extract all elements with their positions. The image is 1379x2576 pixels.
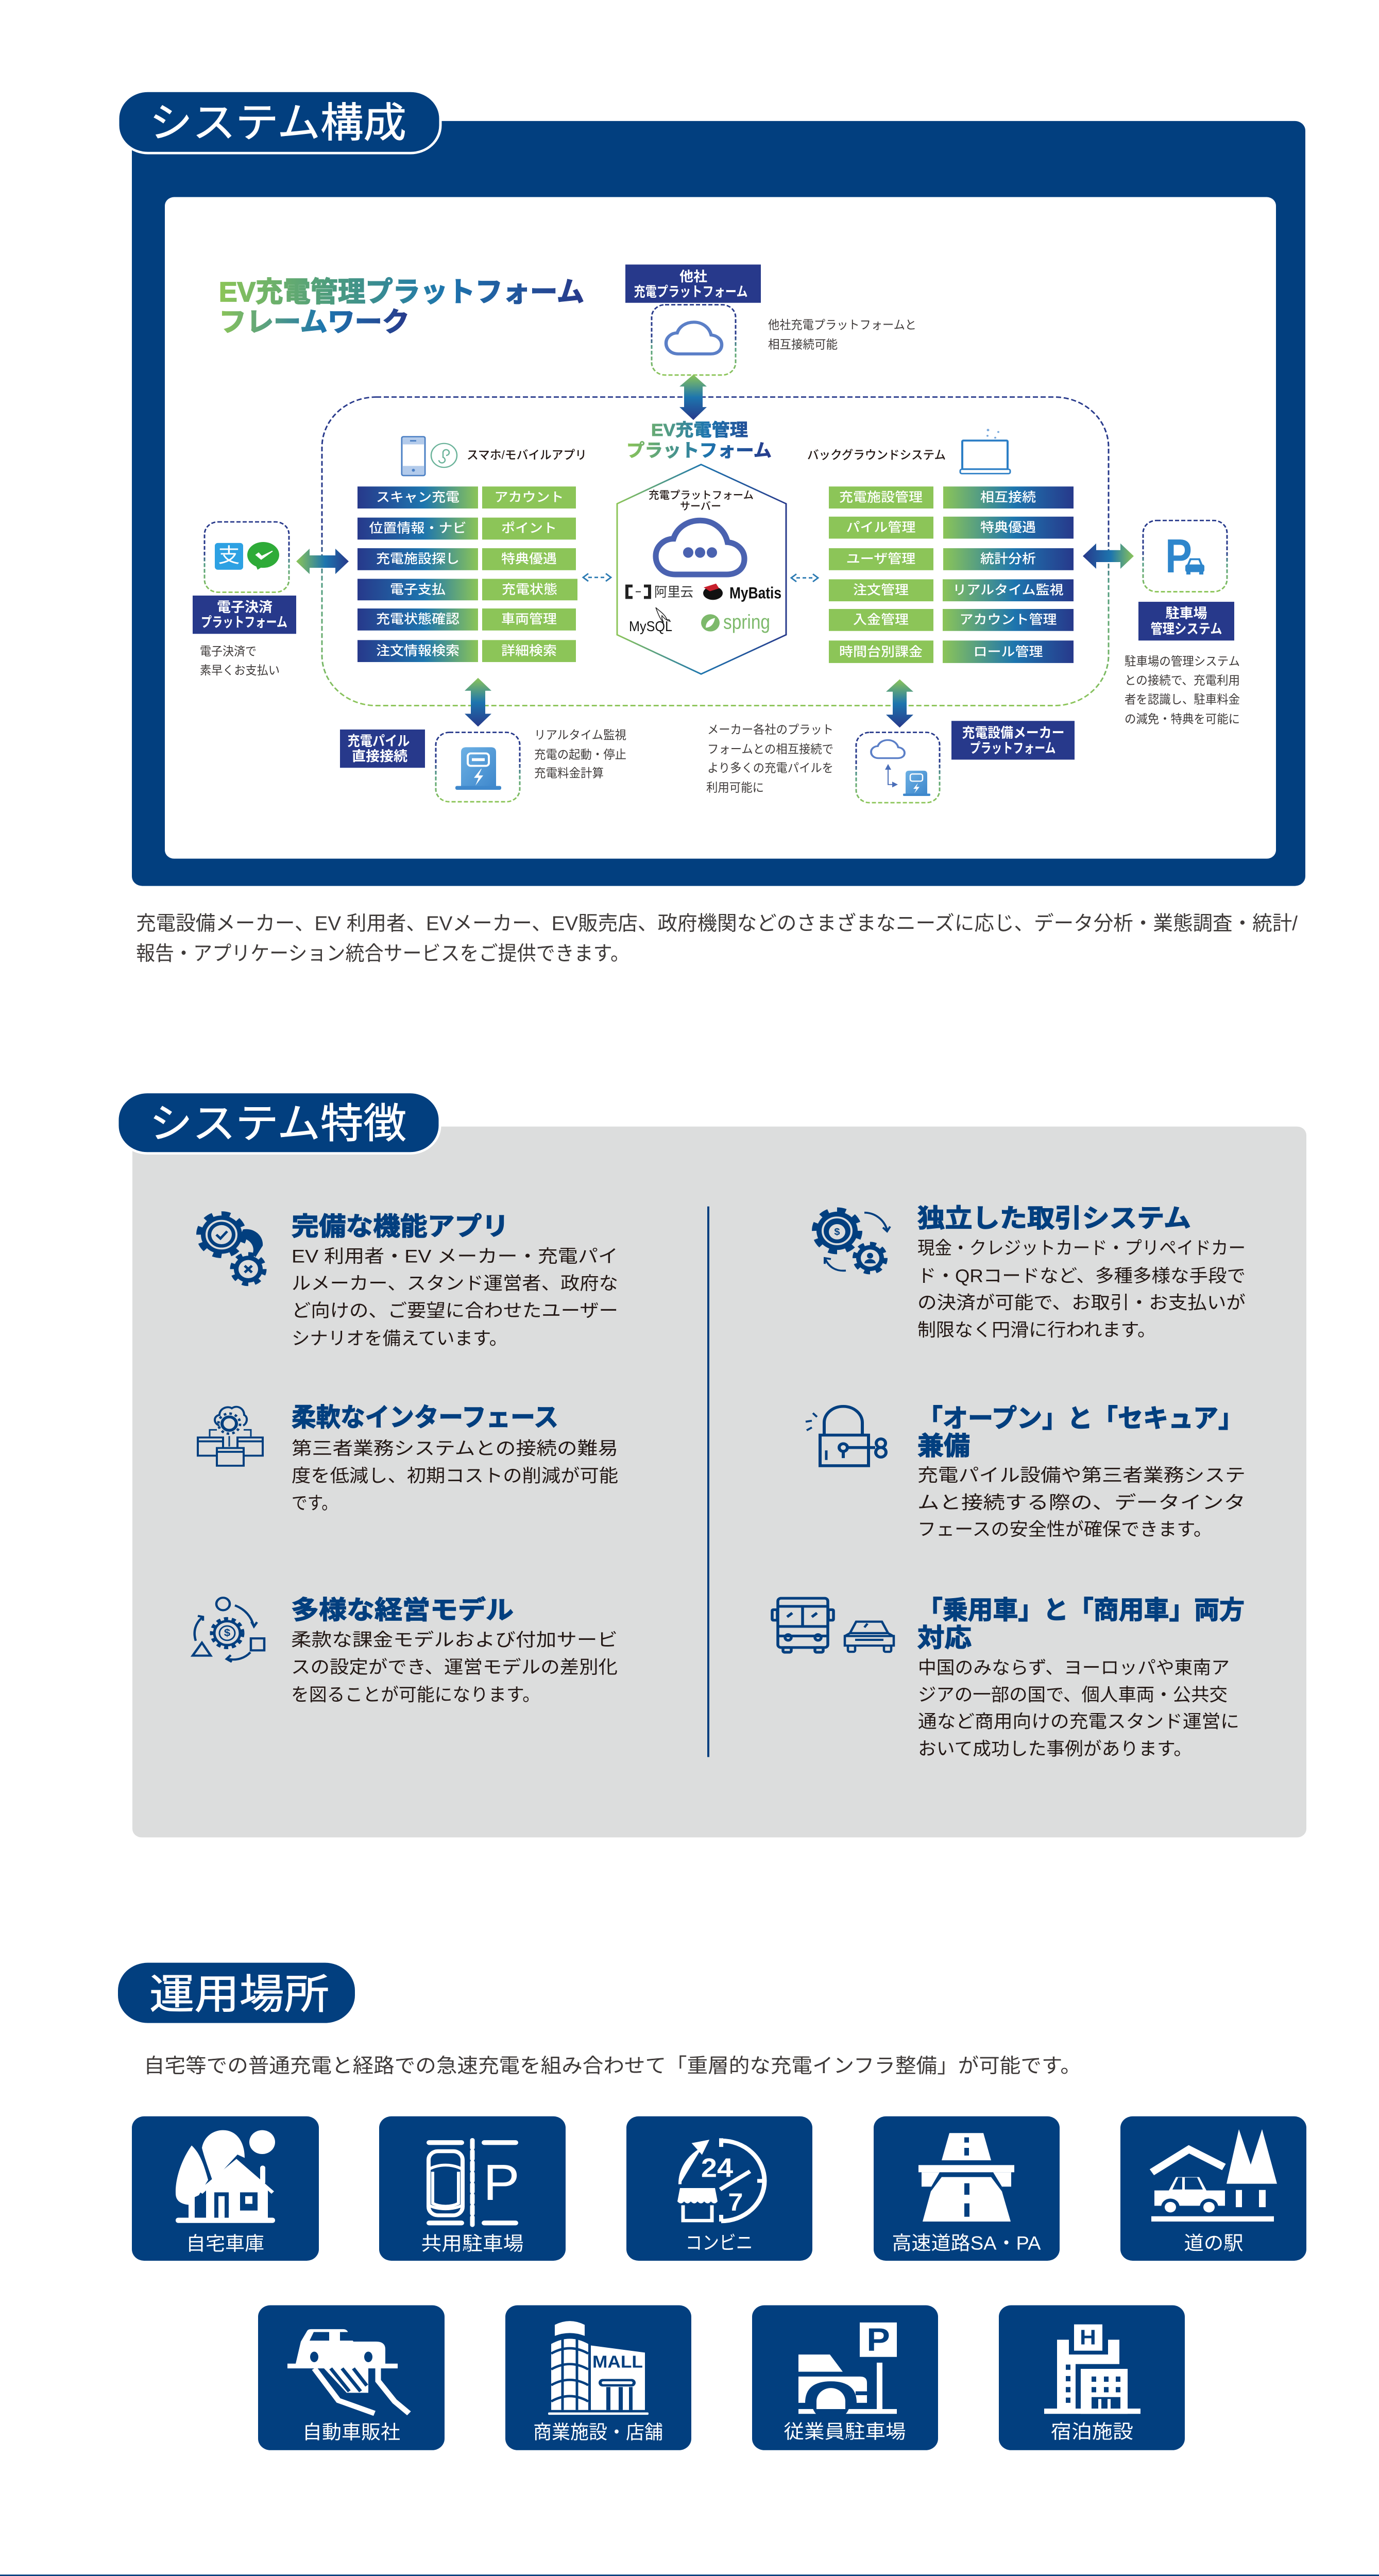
title: 独立した取引システム — [917, 1204, 1191, 1232]
icon: parking bay — [429, 2140, 516, 2226]
arrow: background to equipment maker — [886, 679, 913, 727]
heading pill — [117, 1092, 440, 1154]
body: の決済が可能で、お取引・お支払いが — [917, 1293, 1246, 1313]
navy frame — [132, 121, 1305, 886]
title: 柔軟なインターフェース — [292, 1403, 558, 1432]
card: highway service area — [874, 2116, 1060, 2261]
intro text: 自宅等での普通充電と経路での急速充電を組み合わせて「重層的な充電インフラ整備」が可能です。 — [144, 2054, 1081, 2077]
feature buttons: background system: ユーザ管理 — [846, 551, 915, 566]
icon: car on platform — [287, 2329, 409, 2413]
caption text — [136, 912, 1298, 965]
feature buttons: background system: 充電施設管理 — [839, 489, 923, 504]
body: 通など商用向けの充電スタンド運営に — [918, 1711, 1239, 1732]
feature buttons: background system: 入金管理 — [853, 612, 909, 627]
description: 者を認識し、駐車料金 — [1125, 693, 1240, 706]
feature buttons: mobile app: 詳細検索 — [501, 643, 557, 658]
icon: charger — [455, 747, 501, 790]
white inner panel — [165, 197, 1276, 859]
body — [292, 1246, 618, 1349]
dashed icon box — [205, 522, 289, 592]
arrow: app to charger — [465, 678, 491, 726]
icon: hotel — [1044, 2325, 1140, 2414]
feature buttons: background system: 相互接続 — [980, 489, 1036, 504]
icon: cloud and windows — [198, 1407, 263, 1466]
feature buttons: mobile app: 位置情報・ナビ — [369, 521, 466, 536]
arrow: app to server — [583, 573, 611, 581]
body — [291, 1630, 618, 1705]
other-company platform node — [625, 264, 916, 375]
dashed icon box — [436, 733, 520, 802]
panel: system features — [117, 1092, 1306, 1837]
body: ド・QRコードなど、多種多様な手段で — [917, 1266, 1246, 1286]
icon: phone — [402, 437, 425, 476]
description — [1125, 655, 1240, 726]
large dashed platform boundary — [322, 397, 1109, 706]
description: 利用可能に — [706, 781, 764, 794]
body: 充電パイル設備や第三者業務システ — [917, 1465, 1246, 1485]
feature: independent payment — [814, 1204, 1246, 1340]
feature: flexible interface — [198, 1403, 618, 1513]
label box: 充電パイル — [348, 733, 410, 749]
description: より多くの充電パイルを — [707, 761, 833, 775]
icon: mall building — [548, 2321, 649, 2415]
label: 自動車販社 — [302, 2422, 400, 2443]
caption text: 報告・アプリケーション統合サービスをご提供できます。 — [136, 942, 629, 965]
description — [200, 645, 280, 677]
icon: laptop — [960, 429, 1010, 473]
feature: complete app — [199, 1212, 618, 1349]
body — [918, 1657, 1239, 1759]
label box: 充電プラットフォーム — [634, 284, 748, 299]
feature buttons: mobile app: 充電状態確認 — [376, 612, 459, 626]
label box: 駐車場 — [1165, 605, 1207, 621]
arrow: background to parking — [1083, 544, 1134, 569]
feature buttons: mobile app: ポイント — [501, 521, 557, 536]
icon: link arrow — [885, 764, 898, 787]
icon: money gears: $ — [834, 1227, 840, 1238]
body: を図ることが可能になります。 — [291, 1685, 540, 1705]
body: ジアの一部の国で、個人車両・公共交 — [918, 1685, 1228, 1705]
feature buttons: background system: 注文管理 — [853, 582, 909, 597]
label box — [193, 596, 296, 634]
background system header — [807, 429, 1010, 473]
diagram title — [219, 276, 584, 337]
description: 駐車場の管理システム — [1125, 655, 1240, 668]
label box: 管理システム — [1151, 621, 1222, 637]
feature buttons: mobile app: スキャン充電 — [376, 489, 459, 504]
icon: parked car with sign — [798, 2323, 897, 2420]
logo: aliyun — [627, 585, 693, 600]
label box: 充電設備メーカー — [962, 725, 1064, 740]
description: 他社充電プラットフォームと — [768, 318, 916, 332]
description — [768, 318, 916, 351]
feature: open and secure — [806, 1404, 1246, 1539]
logo: spring — [701, 611, 770, 633]
section heading panel: system configuration — [118, 91, 1305, 886]
icon: house and trees — [176, 2130, 275, 2223]
feature buttons: mobile app: 車両管理 — [501, 612, 557, 626]
icon: charger small — [903, 771, 930, 796]
heading pill — [118, 91, 440, 153]
icon: wechat — [247, 542, 279, 570]
card: lodging — [999, 2305, 1185, 2450]
arrow: payment to app — [296, 549, 349, 574]
icon: P letter: P — [866, 2321, 890, 2358]
label: 共用駐車場 — [421, 2233, 523, 2255]
icon: cloud with dots — [656, 520, 744, 574]
icon: padlock — [806, 1406, 886, 1466]
dashed icon box — [652, 304, 736, 375]
card: convenience store — [626, 2116, 812, 2261]
body: 現金・クレジットカード・プリペイドカー — [917, 1238, 1246, 1258]
body — [917, 1238, 1246, 1340]
label box: 直接接続 — [352, 749, 407, 764]
feature buttons: background system: 特典優遇 — [980, 520, 1036, 535]
label box — [340, 730, 425, 768]
feature buttons: background system: リアルタイム監視 — [952, 582, 1064, 597]
icon: alipay: 支 — [218, 544, 240, 567]
feature buttons: background system — [829, 486, 1074, 663]
divider — [707, 1207, 709, 1757]
icon: bus — [772, 1598, 833, 1652]
icon: P letter: P — [483, 2154, 520, 2211]
icon: H letter: H — [1080, 2326, 1096, 2349]
icon: 24/7 clock and shop — [677, 2138, 764, 2222]
description: 素早くお支払い — [200, 664, 280, 677]
icon: mini program — [431, 444, 457, 467]
title — [917, 1596, 1245, 1652]
label: バックグラウンドシステム — [807, 449, 946, 462]
body: 第三者業務システムとの接続の難易 — [292, 1438, 618, 1459]
heading: operating locations — [118, 1963, 355, 2023]
title: 対応 — [917, 1624, 972, 1652]
label: 高速道路SA・PA — [892, 2233, 1041, 2254]
description — [534, 728, 626, 780]
feature buttons: background system: 時間台別課金 — [839, 644, 923, 659]
label box: プラットフォーム — [201, 615, 287, 630]
description — [706, 723, 833, 794]
caption text: 充電設備メーカー、EV 利用者、EVメーカー、EV販売店、政府機関などのさまざまなニーズに応じ、データ分析・業態調査・統計/ — [136, 912, 1298, 935]
server label: サーバー — [680, 501, 721, 512]
label box — [1138, 602, 1234, 640]
icon: parking P with car: P — [1165, 530, 1192, 583]
icon: cloud small — [871, 740, 905, 758]
logo: mysql — [629, 607, 672, 635]
label box: 電子決済 — [217, 599, 273, 615]
feature buttons: mobile app: 注文情報検索 — [376, 643, 459, 658]
card: commercial facility — [505, 2305, 691, 2450]
body: おいて成功した事例があります。 — [918, 1739, 1192, 1759]
description: フォームとの相互接続で — [707, 743, 833, 756]
heading: operating locations: 運用場所 — [149, 1971, 329, 2018]
arrow: other platform to core — [679, 375, 707, 420]
feature buttons: mobile app: 充電状態 — [502, 582, 557, 597]
equipment maker platform node — [706, 721, 1075, 803]
body: です。 — [292, 1493, 337, 1513]
icon: alipay — [215, 543, 243, 570]
feature buttons: mobile app: 電子支払 — [390, 582, 446, 597]
feature buttons: mobile app: 特典優遇 — [501, 551, 557, 566]
title: 「乗用車」と「商用車」両方 — [917, 1596, 1245, 1624]
icon: money gears — [814, 1210, 890, 1273]
card: home garage — [132, 2116, 319, 2261]
body: EV 利用者・EV メーカー・充電パイ — [292, 1246, 618, 1266]
payment platform node — [193, 522, 296, 677]
logo: mybatis: MyBatis — [729, 584, 781, 602]
bottom rule — [0, 2574, 1379, 2576]
label box — [951, 721, 1075, 759]
description: 相互接続可能 — [768, 338, 838, 351]
icon: 24/7 clock and shop: 7 — [728, 2189, 743, 2216]
card: employee parking — [752, 2305, 938, 2450]
icon: car, roof, trees — [1151, 2129, 1277, 2222]
body — [292, 1438, 618, 1513]
feature buttons: background system: パイル管理 — [846, 520, 915, 535]
core platform heading: EV充電管理 — [651, 420, 748, 440]
card: car dealership — [258, 2305, 445, 2450]
label box: プラットフォーム — [969, 740, 1056, 756]
feature buttons: mobile app — [357, 486, 577, 662]
body: スの設定ができ、運営モデルの差別化 — [291, 1657, 618, 1677]
title: 多様な経営モデル — [291, 1596, 514, 1624]
icon: cycle with gear — [193, 1598, 264, 1662]
card: roadside station — [1120, 2116, 1306, 2261]
label: 道の駅 — [1184, 2233, 1243, 2254]
logo: mysql: MySQL — [629, 619, 672, 635]
feature: business models — [193, 1596, 618, 1705]
icon: cloud — [666, 322, 722, 354]
heading pill: システム構成 — [149, 100, 406, 146]
body: 度を低減し、初期コストの削減が可能 — [292, 1466, 618, 1486]
label box: 他社 — [679, 269, 707, 284]
body: フェースの安全性が確保できます。 — [917, 1519, 1212, 1539]
description: メーカー各社のプラット — [707, 723, 833, 737]
feature buttons: background system: ロール管理 — [974, 644, 1043, 659]
label: 自宅車庫 — [186, 2233, 264, 2255]
icon: gears — [199, 1214, 264, 1284]
icon: MALL letters: MALL — [592, 2353, 643, 2371]
label: コンビニ — [686, 2232, 753, 2253]
diagram title: フレームワーク — [219, 308, 410, 337]
direct charger node — [340, 728, 626, 802]
body: 制限なく円滑に行われます。 — [917, 1320, 1156, 1340]
icon: 24/7 clock and shop: 24 — [701, 2153, 733, 2183]
body: ムと接続する際の、データインタ — [917, 1493, 1246, 1513]
label: 宿泊施設 — [1051, 2421, 1133, 2443]
body: 柔款な課金モデルおよび付加サービ — [291, 1630, 618, 1650]
label: 商業施設・店舗 — [533, 2422, 663, 2443]
title — [917, 1404, 1244, 1460]
feature buttons: mobile app: 充電施設探し — [376, 551, 459, 566]
feature buttons: background system: 統計分析 — [980, 551, 1036, 566]
feature buttons: mobile app: アカウント — [495, 489, 564, 504]
server label — [649, 489, 754, 512]
icon: highway and bridge — [918, 2133, 1014, 2222]
body: ど向けの、ご要望に合わせたユーザー — [292, 1300, 618, 1321]
core platform heading: プラットフォーム — [626, 440, 772, 461]
icon: car — [845, 1622, 894, 1652]
diagram title: EV充電管理プラットフォーム — [219, 276, 584, 308]
card: shared parking — [379, 2116, 566, 2261]
arrow: server to background — [791, 574, 818, 582]
mobile app header — [402, 437, 587, 476]
label box — [625, 264, 761, 303]
dashed icon box — [1143, 520, 1227, 592]
feature: passenger and commercial vehicles — [772, 1596, 1245, 1759]
title: 「オープン」と「セキュア」 — [917, 1404, 1244, 1432]
body — [917, 1465, 1246, 1539]
description: との接続で、充電利用 — [1125, 674, 1240, 687]
logo: spring: spring — [723, 611, 770, 633]
dashed icon box — [856, 733, 940, 803]
core platform heading — [626, 420, 772, 461]
description: 充電の起動・停止 — [534, 748, 626, 761]
body: ルメーカー、スタンド運営者、政府な — [292, 1273, 618, 1294]
description: の減免・特典を可能に — [1125, 713, 1240, 726]
body: シナリオを備えています。 — [292, 1328, 507, 1349]
hexagon: platform server — [617, 465, 786, 674]
description: 電子決済で — [200, 645, 257, 658]
label: スマホ/モバイルアプリ — [467, 449, 587, 462]
feature buttons: background system: アカウント管理 — [960, 612, 1057, 627]
logo: aliyun: 阿里云 — [654, 585, 693, 600]
parking system node — [1125, 520, 1240, 726]
title: 完備な機能アプリ — [292, 1212, 509, 1241]
label: 従業員駐車場 — [784, 2421, 906, 2443]
description: 充電料金計算 — [534, 767, 604, 780]
title: 兼備 — [917, 1432, 970, 1460]
icon: currency mark: $ — [224, 1628, 230, 1639]
body: 中国のみならず、ヨーロッパや東南ア — [918, 1657, 1230, 1677]
server label: 充電プラットフォーム — [649, 489, 754, 501]
heading pill: システム特徴 — [149, 1100, 406, 1147]
logo: mybatis — [703, 584, 781, 602]
description: リアルタイム監視 — [534, 728, 626, 742]
